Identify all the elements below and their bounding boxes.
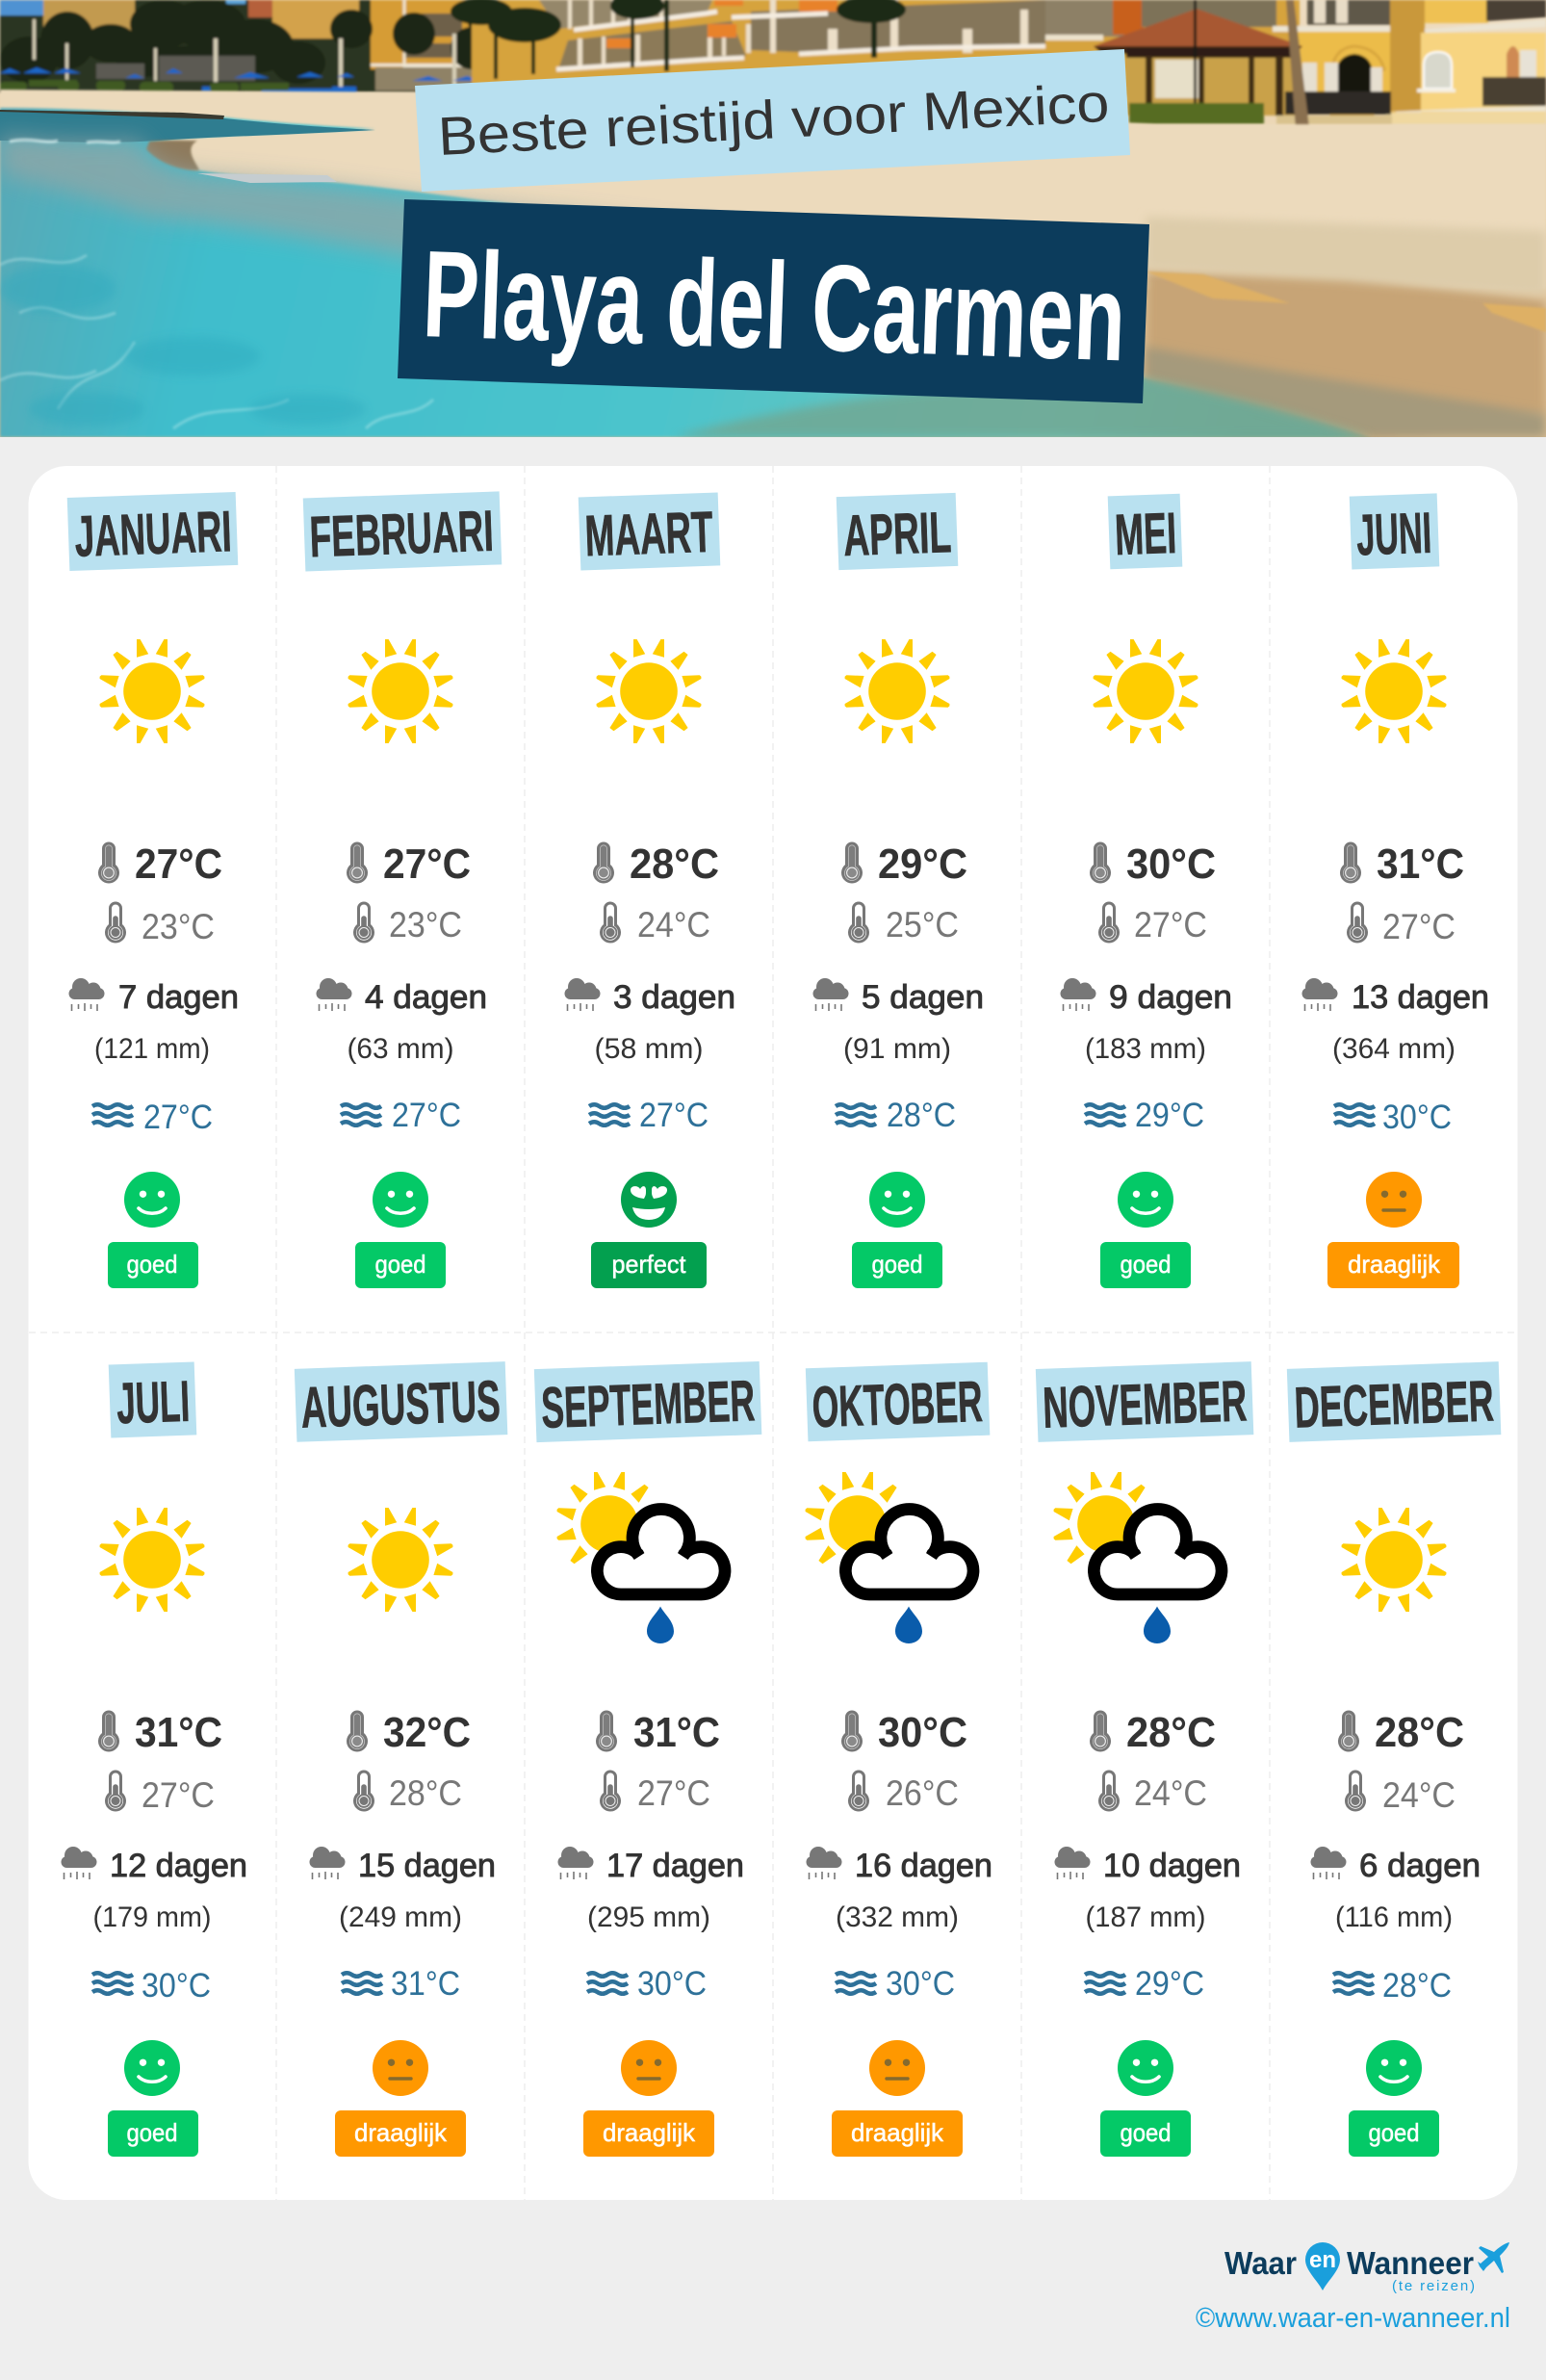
month label: JANUARI	[73, 499, 233, 569]
min temperature	[600, 1770, 710, 1813]
rainfall: (295 mm)	[587, 1901, 710, 1933]
rain days: 4 dagen	[365, 979, 487, 1016]
sea temperature	[589, 1097, 709, 1134]
rating badge	[852, 1242, 942, 1288]
min temperature: 24°C	[637, 905, 710, 944]
month label	[1036, 1361, 1253, 1442]
month label: OKTOBER	[812, 1369, 984, 1439]
rain days: 6 dagen	[1359, 1848, 1481, 1884]
min temperature	[1098, 901, 1207, 944]
sea temperature: 27°C	[392, 1097, 461, 1134]
sea temperature	[1085, 1097, 1204, 1134]
rainfall: (364 mm)	[1332, 1033, 1456, 1065]
rainfall: (332 mm)	[836, 1901, 959, 1933]
max temperature: 28°C	[630, 841, 719, 888]
sea temperature: 30°C	[637, 1965, 707, 2003]
sea temperature	[92, 1099, 213, 1136]
sea temperature	[1334, 1099, 1452, 1136]
sea temperature: 29°C	[1135, 1965, 1204, 2003]
column: februari	[303, 491, 502, 1288]
sea temperature: 30°C	[886, 1965, 955, 2003]
icon: map pin	[1305, 2242, 1340, 2290]
sea temperature: 31°C	[391, 1965, 460, 2003]
subtitle banner	[415, 49, 1130, 192]
sand, water and shoreline	[0, 90, 1546, 289]
sea temperature: 30°C	[1382, 1099, 1452, 1136]
rain days	[812, 978, 984, 1016]
month label	[295, 1361, 507, 1442]
icon: sun	[1342, 1508, 1446, 1612]
month label	[67, 492, 238, 571]
month label: JUNI	[1355, 501, 1432, 567]
min temperature	[1347, 901, 1456, 946]
min temperature: 27°C	[1382, 907, 1456, 946]
rating face	[869, 1172, 925, 1228]
rating badge	[108, 1242, 198, 1288]
min temperature	[353, 1770, 462, 1813]
rain days: 15 dagen	[358, 1848, 496, 1884]
panel: climate table	[29, 466, 1517, 2200]
rain days	[564, 978, 735, 1016]
rating face	[621, 2040, 677, 2096]
website credit: ©www.waar-en-wanneer.nl	[1196, 2303, 1510, 2334]
sea temperature	[92, 1967, 211, 2005]
rainfall: (187 mm)	[1086, 1901, 1205, 1933]
max temperature: 31°C	[1377, 841, 1464, 888]
month label	[534, 1361, 761, 1442]
min temperature	[1098, 1770, 1207, 1813]
max temperature	[98, 841, 222, 888]
title banner	[398, 199, 1149, 403]
sea temperature: 28°C	[887, 1097, 956, 1134]
sea temperature	[587, 1965, 707, 2003]
central building	[472, 0, 1300, 96]
min temperature: 23°C	[389, 905, 462, 944]
rainfall: (121 mm)	[94, 1033, 210, 1065]
month label	[806, 1362, 990, 1441]
min temperature	[1345, 1770, 1456, 1815]
sea temperature	[342, 1965, 460, 2003]
month label: MEI	[1114, 501, 1177, 567]
rain days	[69, 978, 239, 1016]
icon: sun	[597, 639, 701, 743]
right building	[1045, 0, 1132, 37]
icon: sun behind rain cloud	[557, 1472, 725, 1643]
month label: AUGUSTUS	[300, 1368, 502, 1440]
month label	[109, 1361, 196, 1438]
max temperature	[593, 841, 719, 888]
rating badge	[1100, 2110, 1191, 2157]
rating badge: perfect	[612, 1250, 686, 1279]
max temperature	[841, 1709, 967, 1756]
icon: sun	[1342, 639, 1446, 743]
rain days: 16 dagen	[855, 1848, 992, 1884]
max temperature	[347, 1709, 471, 1756]
column: oktober	[806, 1362, 992, 2157]
rating badge	[591, 1242, 707, 1288]
logo: Waar en Wanneer: (te reizen)	[1392, 2278, 1475, 2294]
month label	[1108, 494, 1182, 569]
month label	[579, 492, 720, 570]
rating face	[373, 2040, 428, 2096]
sea temperature: 27°C	[143, 1099, 213, 1136]
rainfall: (63 mm)	[347, 1033, 454, 1065]
min temperature: 27°C	[637, 1773, 710, 1813]
rain days: 5 dagen	[862, 979, 984, 1016]
header photo: beach with hotel	[0, 0, 1546, 437]
column: september	[534, 1361, 761, 2157]
min temperature	[600, 901, 710, 944]
max temperature: 28°C	[1126, 1709, 1216, 1756]
rainfall: (183 mm)	[1085, 1033, 1206, 1065]
rainfall: (116 mm)	[1335, 1901, 1453, 1933]
rating badge	[335, 2110, 466, 2157]
icon: sun	[845, 639, 949, 743]
rating badge: goed	[375, 1250, 425, 1279]
rating badge	[355, 1242, 446, 1288]
rain days	[1061, 978, 1232, 1016]
month label	[837, 493, 958, 570]
rating face	[1366, 1172, 1422, 1228]
min temperature: 28°C	[389, 1773, 462, 1813]
month label: APRIL	[842, 500, 952, 568]
min temperature	[353, 901, 462, 944]
sea temperature	[341, 1097, 461, 1134]
rating face	[124, 1172, 180, 1228]
rain days: 7 dagen	[118, 979, 239, 1016]
gazebo	[1126, 58, 1295, 116]
max temperature: 31°C	[633, 1709, 720, 1756]
max temperature	[98, 1709, 222, 1756]
rating badge: goed	[127, 1250, 177, 1279]
min temperature: 26°C	[886, 1773, 959, 1813]
logo: Waar en Wanneer: Waar	[1224, 2245, 1297, 2281]
sea temperature: 28°C	[1382, 1967, 1452, 2005]
sea temperature: 27°C	[639, 1097, 709, 1134]
rain days: 17 dagen	[606, 1848, 744, 1884]
max temperature	[1090, 841, 1216, 888]
rating badge	[583, 2110, 714, 2157]
min temperature: 27°C	[1134, 905, 1207, 944]
sea temperature	[836, 1965, 955, 2003]
min temperature	[105, 1770, 215, 1815]
max temperature: 28°C	[1375, 1709, 1464, 1756]
max temperature	[1340, 841, 1464, 888]
max temperature: 27°C	[135, 841, 222, 888]
rain days: 9 dagen	[1109, 979, 1232, 1016]
max temperature: 29°C	[878, 841, 967, 888]
icon: airplane	[1478, 2242, 1509, 2273]
max temperature	[1338, 1709, 1464, 1756]
rating badge: draaglijk	[354, 2118, 448, 2147]
sea temperature	[1333, 1967, 1452, 2005]
month label: NOVEMBER	[1042, 1368, 1248, 1440]
rain days: 12 dagen	[110, 1848, 247, 1884]
month label	[1350, 493, 1439, 570]
column: juli	[62, 1361, 247, 2157]
min temperature: 23°C	[142, 907, 215, 946]
rating badge: goed	[1121, 1250, 1171, 1279]
icon: sun behind rain cloud	[1054, 1472, 1222, 1643]
rating badge: goed	[872, 1250, 922, 1279]
rating face	[1118, 2040, 1173, 2096]
month label: MAART	[583, 500, 714, 568]
rating badge: draaglijk	[603, 2118, 696, 2147]
column: juni	[1301, 493, 1489, 1288]
rating face	[869, 2040, 925, 2096]
column: april	[812, 493, 984, 1288]
rain days	[316, 978, 487, 1016]
icon: sun	[348, 639, 452, 743]
month label: JULI	[116, 1369, 191, 1436]
sea temperature: 29°C	[1135, 1097, 1204, 1134]
icon: sun	[100, 639, 204, 743]
sea temperature: 30°C	[142, 1967, 211, 2005]
rating face	[124, 2040, 180, 2096]
sea temperature	[1085, 1965, 1204, 2003]
min temperature: 27°C	[142, 1775, 215, 1815]
min temperature	[105, 901, 215, 946]
icon: sun	[348, 1508, 452, 1612]
rainfall: (249 mm)	[339, 1901, 462, 1933]
rating badge: draaglijk	[851, 2118, 944, 2147]
rating badge	[1327, 1242, 1459, 1288]
logo: Waar en Wanneer	[1224, 2242, 1509, 2294]
max temperature	[841, 841, 967, 888]
min temperature: 24°C	[1134, 1773, 1207, 1813]
max temperature: 30°C	[878, 1709, 967, 1756]
max temperature: 27°C	[383, 841, 471, 888]
max temperature	[347, 841, 471, 888]
icon: sun	[100, 1508, 204, 1612]
month label: SEPTEMBER	[540, 1368, 756, 1440]
max temperature	[596, 1709, 720, 1756]
rain days	[1311, 1847, 1481, 1884]
rating badge: goed	[1121, 2118, 1171, 2147]
sea temperature	[836, 1097, 956, 1134]
rating badge: goed	[1369, 2118, 1419, 2147]
min temperature: 24°C	[1382, 1775, 1456, 1815]
rainfall: (58 mm)	[594, 1033, 704, 1065]
rating face	[1118, 1172, 1173, 1228]
column: mei	[1061, 494, 1232, 1288]
icon: map pin: en	[1309, 2247, 1336, 2273]
subtitle banner: Beste reistijd voor Mexico	[436, 72, 1111, 167]
column: augustus	[295, 1361, 507, 2157]
min temperature: 25°C	[886, 905, 959, 944]
logo: Waar en Wanneer: Wanneer	[1347, 2245, 1474, 2281]
rating badge	[108, 2110, 198, 2157]
rainfall: (91 mm)	[843, 1033, 951, 1065]
column: januari	[67, 492, 239, 1288]
title banner: Playa del Carmen	[421, 225, 1128, 387]
rating badge: draaglijk	[1348, 1250, 1441, 1279]
rating face	[621, 1172, 677, 1228]
column: november	[1036, 1361, 1253, 2157]
rain days: 13 dagen	[1352, 979, 1489, 1016]
rainfall: (179 mm)	[92, 1901, 212, 1933]
min temperature	[848, 1770, 959, 1813]
rain days: 3 dagen	[613, 979, 735, 1016]
column: december	[1287, 1361, 1501, 2157]
max temperature: 32°C	[383, 1709, 471, 1756]
rating badge: goed	[127, 2118, 177, 2147]
month label	[303, 491, 502, 571]
max temperature: 30°C	[1126, 841, 1216, 888]
rating badge	[1349, 2110, 1439, 2157]
min temperature	[848, 901, 959, 944]
rating badge	[832, 2110, 963, 2157]
icon: sun	[1094, 639, 1198, 743]
rating face	[1366, 2040, 1422, 2096]
column: maart	[564, 492, 735, 1288]
rating badge	[1100, 1242, 1191, 1288]
month label: FEBRUARI	[308, 499, 495, 569]
rain days: 10 dagen	[1103, 1848, 1241, 1884]
icon: sun behind rain cloud	[806, 1472, 973, 1643]
max temperature	[1090, 1709, 1216, 1756]
max temperature: 31°C	[135, 1709, 222, 1756]
rating face	[373, 1172, 428, 1228]
